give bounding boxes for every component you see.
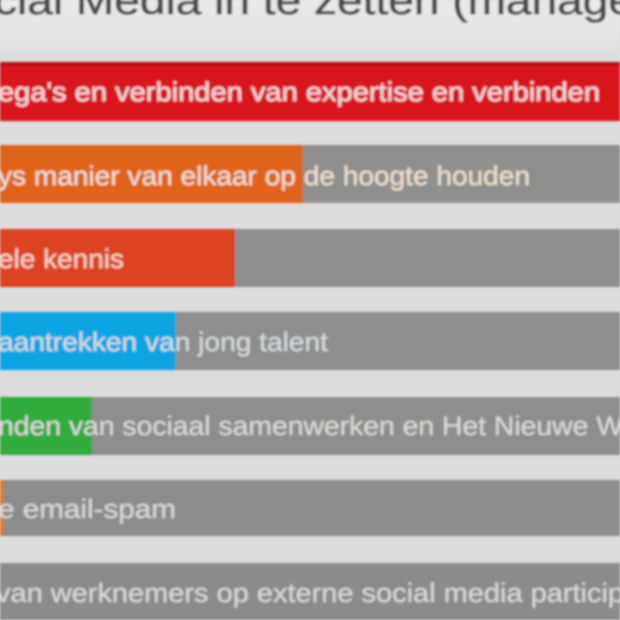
bar 6: email-spam: e email-spam: [0, 494, 176, 524]
bar 6: email-spam: [0, 480, 620, 536]
bar 3: kennis: ele kennis: [0, 244, 124, 274]
bar 7: externe social media participatie: van werknemers op externe social media particip: [0, 578, 620, 608]
bar 3: kennis: [0, 229, 620, 287]
title: [0, 0, 620, 58]
bar 1: expertise en verbinden: [0, 62, 620, 121]
bar 2: elkaar op de hoogte houden: ys manier van elkaar op de hoogte houden: [0, 161, 530, 191]
bar 5: sociaal samenwerken en Het Nieuwe Werken: nden van sociaal samenwerken en Het Nieuwe W: [0, 411, 620, 441]
bar 4: aantrekken van jong talent: aantrekken van jong talent: [0, 327, 329, 357]
bar 7: externe social media participatie: [0, 563, 620, 620]
bar 5: sociaal samenwerken en Het Nieuwe Werken: [0, 397, 620, 455]
bar 1: expertise en verbinden: ega's en verbinden van expertise en verbinden: [0, 77, 600, 107]
bar 2: elkaar op de hoogte houden: [0, 145, 620, 203]
bar 4: aantrekken van jong talent: [0, 312, 620, 370]
